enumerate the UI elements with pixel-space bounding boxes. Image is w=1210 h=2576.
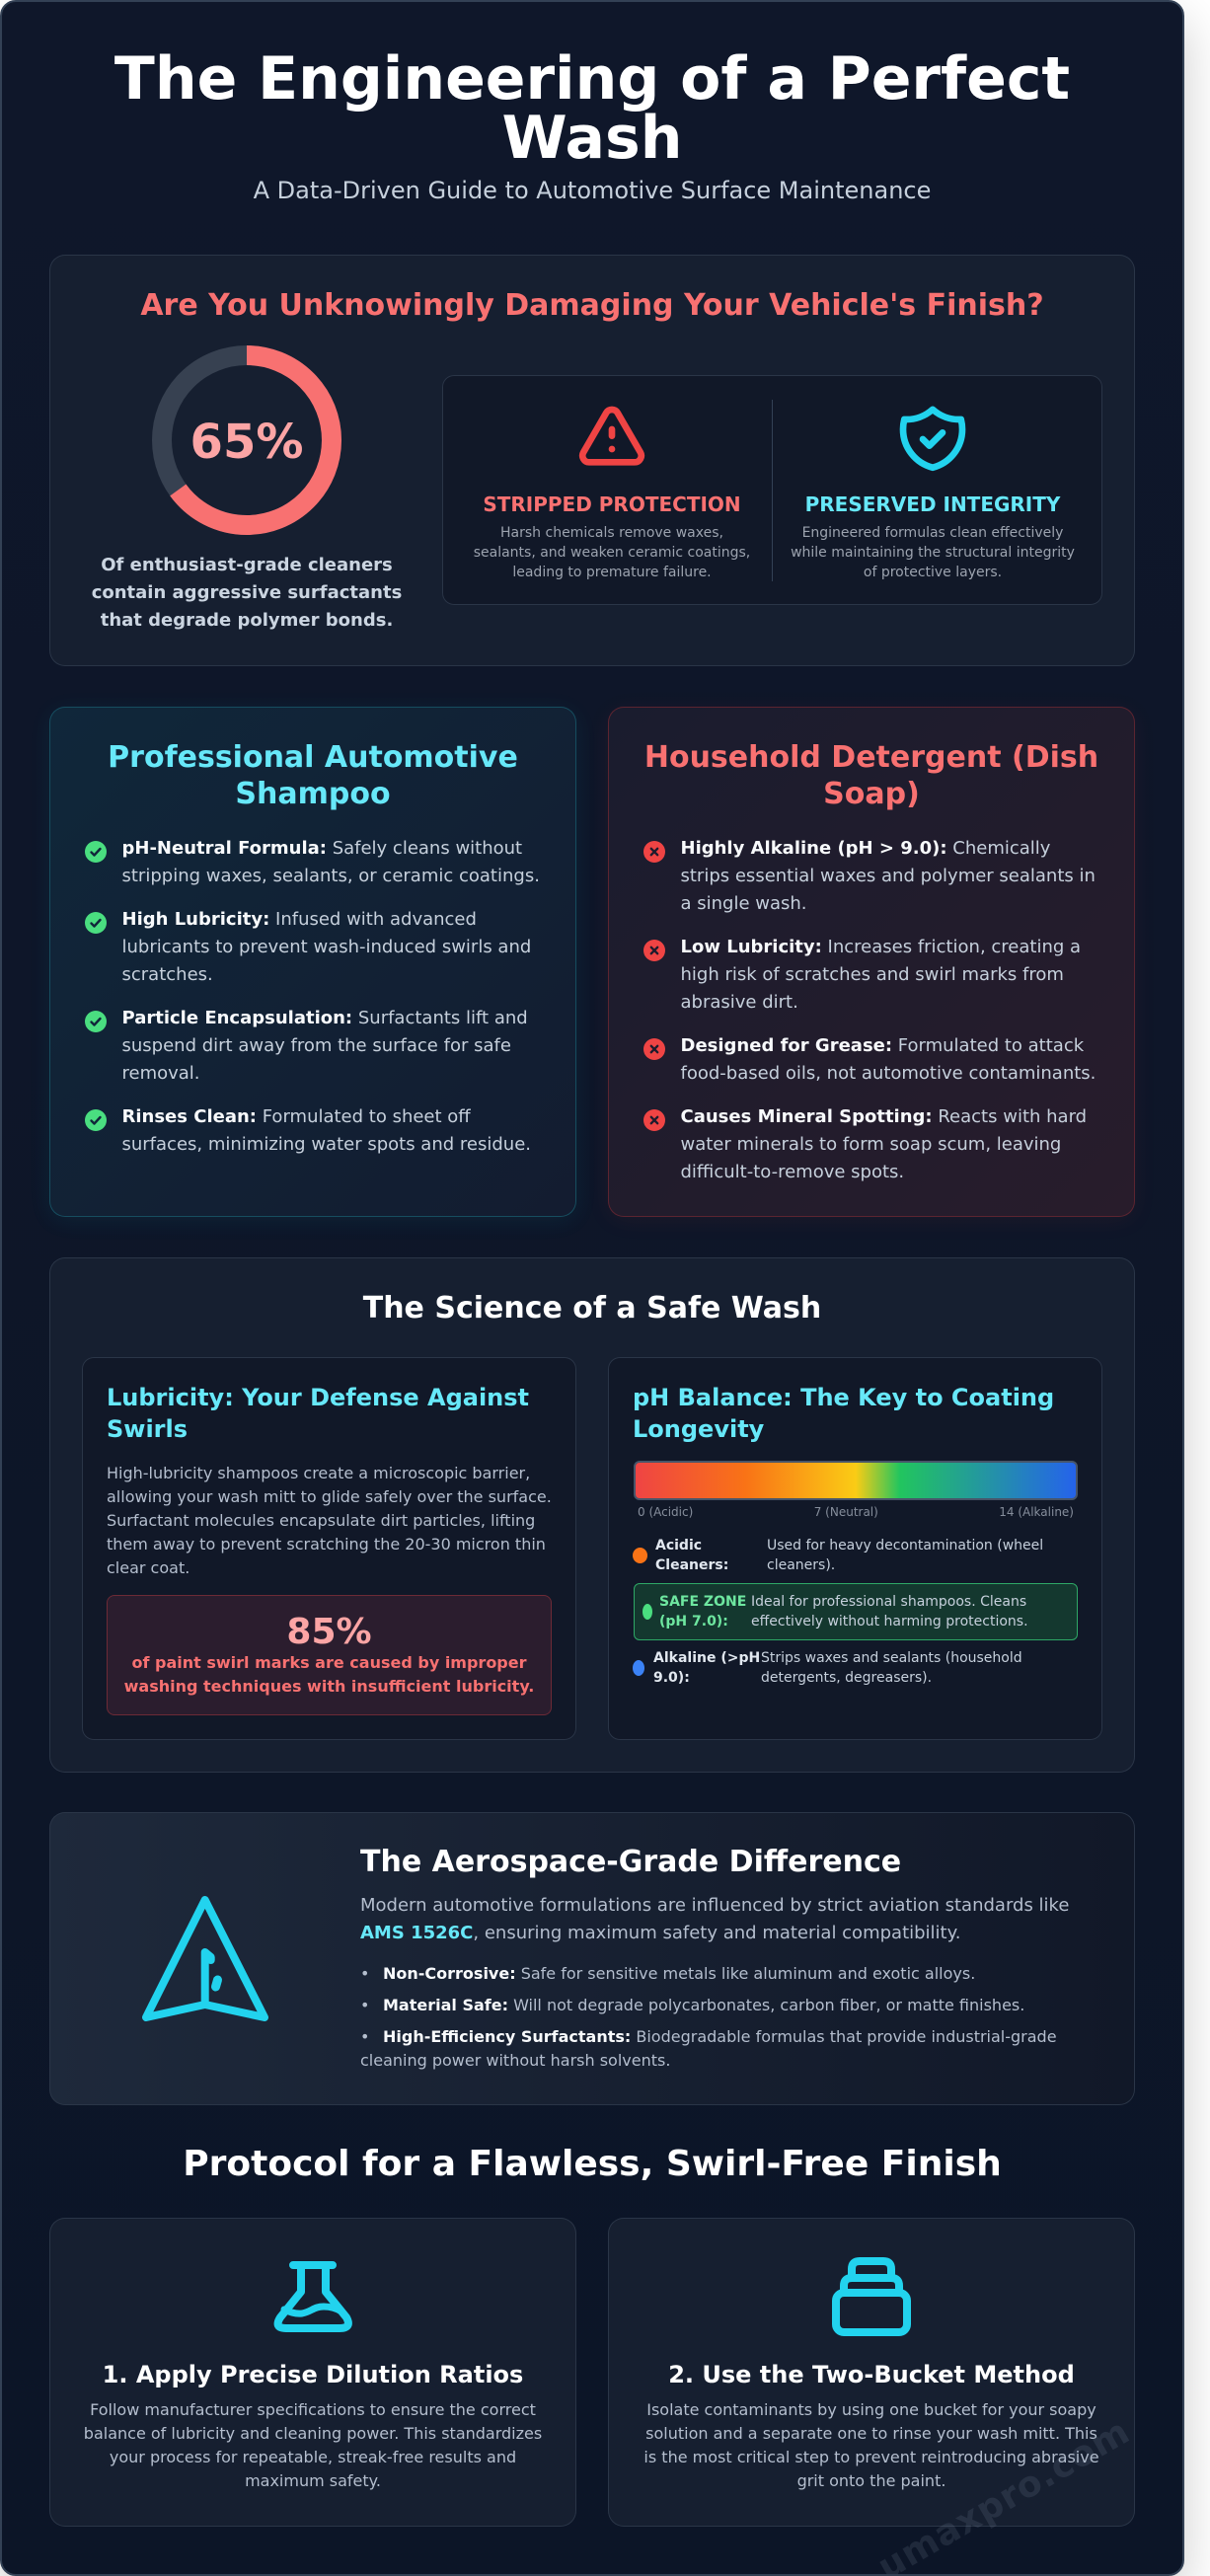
text: lubricity: clear coat. — [107, 1557, 189, 1577]
comparison box: stripped vs preserved — [442, 375, 1102, 605]
icon: buckets — [832, 2257, 911, 2336]
drawback: highly alkaline — [643, 838, 1096, 914]
legend: acidic cleaners: Cleaners: — [655, 1557, 728, 1573]
donut caption: that degrade polymer bonds. — [101, 610, 393, 631]
text: aerospace intro: AMS 1526C, ensuring maximum safety and material compatibility. — [360, 1923, 960, 1943]
legend: safe zone: Ideal for professional shampoos. Cleans — [751, 1594, 1026, 1610]
heading: step 1: 1. Apply Precise Dilution Ratios — [103, 2361, 523, 2388]
benefit: pH-neutral: stripping waxes, sealants, or ceramic coatings. — [122, 866, 540, 886]
heading: shampoo — [108, 740, 518, 811]
heading: protocol: Protocol for a Flawless, Swirl-Free Finish — [183, 2144, 1002, 2184]
donut caption — [92, 555, 402, 631]
title — [114, 44, 1070, 173]
legend: alkaline — [633, 1650, 1022, 1686]
legend: acidic cleaners: cleaners). — [767, 1557, 835, 1573]
text: preserved integrity — [791, 525, 1075, 580]
benefit: particle encapsulation: suspend dirt away from the surface for safe — [122, 1035, 511, 1056]
bullet: high-efficiency surfactants: cleaning power without harsh solvents. — [360, 2051, 670, 2070]
text: stripped protection: sealants, and weaken ceramic coatings, — [474, 545, 750, 561]
benefit: high lubricity: scratches. — [122, 964, 213, 985]
legend: acidic cleaners: Acidic — [655, 1538, 702, 1553]
benefit: rinses clean: Rinses Clean: Formulated to sheet off — [122, 1106, 471, 1127]
legend: alkaline: Strips waxes and sealants (household — [761, 1650, 1022, 1666]
legend: alkaline: 9.0): — [653, 1670, 690, 1686]
stat caption — [124, 1653, 534, 1696]
pH gradient bar — [634, 1461, 1078, 1500]
legend: alkaline: detergents, degreasers). — [761, 1670, 932, 1686]
donut chart: 65 percent — [152, 345, 341, 535]
card: step 1 dilution — [49, 2218, 576, 2527]
stat caption: washing techniques with insufficient lubricity. — [124, 1677, 534, 1696]
text: step 1: your process for repeatable, streak-free results and — [110, 2448, 516, 2466]
icon: warning triangle — [578, 407, 645, 466]
text: step 2 — [643, 2400, 1099, 2490]
benefit: high lubricity: High Lubricity: Infused with advanced — [122, 909, 477, 930]
text: preserved integrity: Engineered formulas clean effectively — [802, 525, 1063, 541]
benefit: rinses clean — [85, 1106, 531, 1155]
text: stripped protection: Harsh chemicals remove waxes, — [500, 525, 723, 541]
text: stripped protection: leading to premature failure. — [512, 565, 712, 580]
drawback: designed for grease: food-based oils, not automotive contaminants. — [681, 1063, 1096, 1084]
panel: are you damaging your finish — [49, 255, 1135, 666]
heading: aerospace: The Aerospace-Grade Difference — [360, 1844, 901, 1879]
drawback: highly alkaline: strips essential waxes and polymer sealants in — [681, 866, 1096, 886]
legend: safe zone: (pH 7.0): — [659, 1614, 728, 1629]
icon: shield check — [900, 407, 965, 472]
legend: safe zone: effectively without harming protections. — [751, 1614, 1028, 1629]
text: step 2: is the most critical step to prevent reintroducing abrasive — [643, 2448, 1099, 2466]
drawback: highly alkaline: Highly Alkaline (pH > 9.0): Chemically — [681, 838, 1050, 859]
text: step 2: solution and a separate one to rinse your wash mitt. This — [645, 2424, 1097, 2443]
donut chart: 65 percent: 65% — [190, 415, 303, 470]
label: preserved integrity: PRESERVED INTEGRITY — [805, 492, 1060, 516]
panel: household detergent — [608, 707, 1135, 1217]
heading: detergent: Household Detergent (Dish — [644, 740, 1098, 775]
benefit: particle encapsulation: Particle Encapsulation: Surfactants lift and — [122, 1008, 528, 1028]
text: step 1: balance of lubricity and cleaning power. This standardizes — [84, 2424, 542, 2443]
text: preserved integrity: of protective layers. — [864, 565, 1002, 580]
legend: acidic cleaners: Used for heavy decontamination (wheel — [767, 1538, 1043, 1553]
text: step 1: Follow manufacturer specifications to ensure the correct — [90, 2400, 536, 2419]
drawback: highly alkaline: a single wash. — [681, 893, 807, 914]
text: aerospace intro — [360, 1895, 1069, 1943]
drawback: mineral spotting: water minerals to form soap scum, leaving — [681, 1134, 1061, 1155]
benefit: rinses clean: surfaces, minimizing water spots and residue. — [122, 1134, 531, 1155]
legend: safe zone: SAFE ZONE — [659, 1594, 746, 1610]
icon: flask — [274, 2261, 352, 2332]
legend: alkaline: Alkaline (>pH — [653, 1650, 760, 1666]
heading: detergent: Soap) — [823, 777, 920, 811]
benefit: particle encapsulation: removal. — [122, 1063, 200, 1084]
drawback: low lubricity: Low Lubricity: Increases friction, creating a — [681, 937, 1081, 957]
benefit: high lubricity — [85, 909, 531, 985]
legend: acidic cleaners — [633, 1538, 1043, 1573]
panel: science of a safe wash — [49, 1257, 1135, 1773]
pH scale labels: 0 (Acidic) — [638, 1505, 693, 1519]
text: step 2: Isolate contaminants by using one bucket for your soapy — [646, 2400, 1097, 2419]
pH scale labels — [638, 1505, 1074, 1519]
benefit: particle encapsulation — [85, 1008, 528, 1084]
text: step 1 — [84, 2400, 542, 2490]
title: The Engineering of a Perfect — [114, 44, 1070, 114]
panel: aerospace-grade difference — [49, 1812, 1135, 2105]
bullet: high-efficiency surfactants: High-Efficiency Surfactants: Biodegradable formulas that provide industrial-grade — [383, 2027, 1057, 2046]
heading: damage question: Are You Unknowingly Damaging Your Vehicle's Finish? — [140, 288, 1044, 323]
bullet: material safe: • — [360, 1996, 369, 2014]
bullet: material safe: Material Safe: Will not degrade polycarbonates, carbon fiber, or matte finishes. — [383, 1996, 1024, 2014]
card: lubricity — [82, 1357, 576, 1740]
drawback: designed for grease: Designed for Grease: Formulated to attack — [681, 1035, 1084, 1056]
heading: step 2: 2. Use the Two-Bucket Method — [668, 2361, 1075, 2388]
panel: professional automotive shampoo — [49, 707, 576, 1217]
bullet: high-efficiency surfactants: • — [360, 2027, 369, 2046]
donut caption: Of enthusiast-grade cleaners — [101, 555, 393, 575]
benefit: high lubricity: lubricants to prevent wash-induced swirls and — [122, 937, 531, 957]
text: lubricity: High-lubricity shampoos create a microscopic barrier, — [107, 1463, 530, 1482]
heading: science: The Science of a Safe Wash — [363, 1291, 821, 1325]
heading: shampoo: Professional Automotive — [108, 740, 518, 775]
text: aerospace intro: Modern automotive formulations are influenced by strict aviation standards like — [360, 1895, 1069, 1916]
text: step 1: maximum safety. — [245, 2471, 381, 2490]
heading: pH balance: Longevity — [633, 1415, 764, 1443]
stat: 85%: 85% — [286, 1612, 372, 1652]
label: stripped protection: STRIPPED PROTECTION — [483, 492, 741, 516]
text: lubricity — [107, 1463, 552, 1577]
text: preserved integrity: while maintaining the structural integrity — [791, 545, 1075, 561]
stat caption: of paint swirl marks are caused by improper — [131, 1653, 527, 1672]
heading: shampoo: Shampoo — [235, 777, 391, 811]
pH scale labels: 14 (Alkaline) — [999, 1505, 1074, 1519]
drawback: designed for grease — [643, 1035, 1096, 1084]
drawback: mineral spotting — [643, 1106, 1087, 1182]
heading: pH balance — [633, 1384, 1054, 1443]
title: Wash — [502, 104, 682, 173]
benefit: pH-neutral — [85, 838, 540, 886]
benefit: pH-neutral: pH-Neutral Formula: Safely cleans without — [122, 838, 522, 859]
heading: detergent — [644, 740, 1098, 811]
donut caption: contain aggressive surfactants — [92, 582, 402, 603]
drawback: low lubricity: high risk of scratches and swirl marks from — [681, 964, 1064, 985]
text: lubricity: Surfactant molecules encapsulate dirt particles, lifting — [107, 1510, 535, 1530]
bullet: non-corrosive: Non-Corrosive: Safe for sensitive metals like aluminum and exotic alloys. — [383, 1964, 975, 1983]
heading: pH balance: pH Balance: The Key to Coating — [633, 1384, 1054, 1411]
legend: safe zone — [634, 1583, 1078, 1640]
subtitle: A Data-Driven Guide to Automotive Surface Maintenance — [254, 177, 931, 204]
card: pH balance — [608, 1357, 1102, 1740]
callout: 85 percent — [107, 1595, 552, 1715]
text: step 2: grit onto the paint. — [797, 2471, 945, 2490]
pH scale labels: 7 (Neutral) — [814, 1505, 878, 1519]
drawback: low lubricity: abrasive dirt. — [681, 992, 798, 1013]
card: step 2 two-bucket — [608, 2218, 1135, 2527]
drawback: mineral spotting: Causes Mineral Spotting: Reacts with hard — [681, 1106, 1087, 1127]
text: stripped protection — [474, 525, 750, 580]
bullet: non-corrosive: • — [360, 1964, 369, 1983]
icon: aerospace arrow — [142, 1896, 268, 2021]
bullet: high-efficiency surfactants — [360, 2027, 1057, 2070]
heading: lubricity — [107, 1384, 529, 1443]
heading: lubricity: Swirls — [107, 1415, 188, 1443]
drawback: low lubricity — [643, 937, 1081, 1013]
text: lubricity: allowing your wash mitt to glide safely over the surface. — [107, 1486, 552, 1506]
heading: lubricity: Lubricity: Your Defense Against — [107, 1384, 529, 1411]
drawback: mineral spotting: difficult-to-remove spots. — [681, 1162, 904, 1182]
text: lubricity: them away to prevent scratching the 20-30 micron thin — [107, 1534, 546, 1553]
